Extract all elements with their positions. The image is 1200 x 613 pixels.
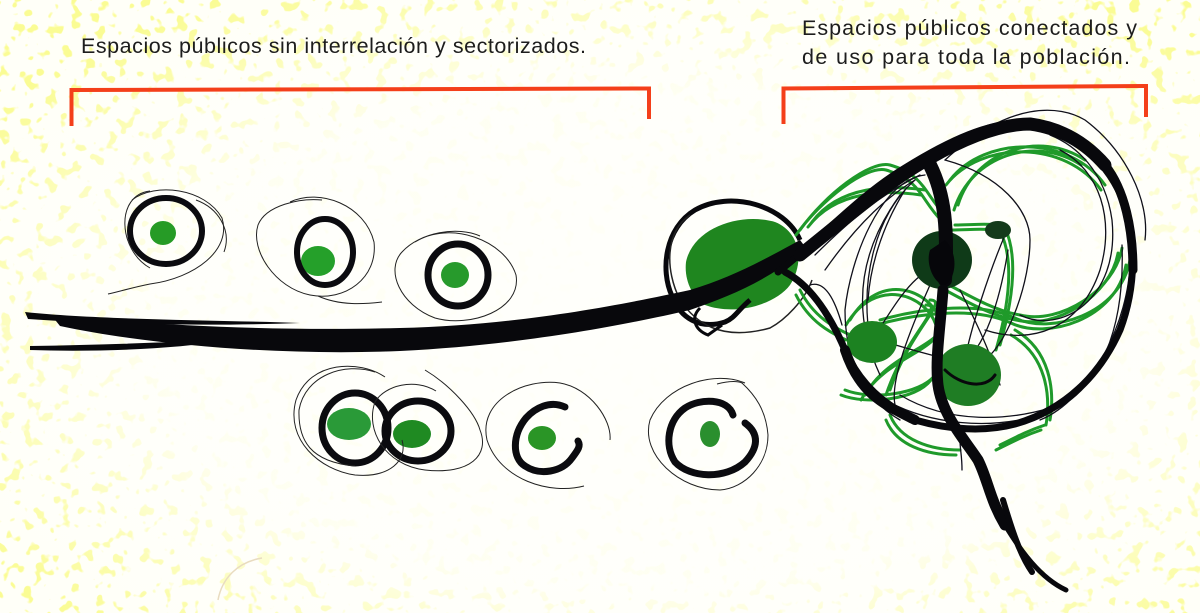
heading: left: Espacios públicos sin interrelación y sectorizados. <box>81 34 586 58</box>
open ring space 1 <box>486 382 610 489</box>
faint pencil mark <box>218 558 262 600</box>
blob: dark space <box>912 231 972 289</box>
bracket: left <box>72 88 649 126</box>
open ring space 2 <box>648 378 768 490</box>
circle group: lower row, isolated spaces <box>294 366 768 490</box>
isolated space 2 <box>257 197 382 304</box>
connected network: right cluster <box>778 110 1146 590</box>
green connections <box>796 146 1130 455</box>
bracket: right <box>784 86 1146 124</box>
main stroke: tapered black line <box>25 240 806 352</box>
blob: lower green space <box>935 344 1001 406</box>
central large space <box>666 201 812 335</box>
isolated space 3 <box>395 231 516 321</box>
isolated space 1 <box>108 190 226 294</box>
overlapping spaces <box>294 366 483 475</box>
thin black lines <box>810 110 1146 470</box>
black spiral <box>778 123 1133 429</box>
heading: right: Espacios públicos conectados y <box>802 16 1137 40</box>
heading: right: de uso para toda la población. <box>802 45 1130 69</box>
heading: right <box>802 16 1137 69</box>
blob: left green space <box>847 321 897 363</box>
black vertical stroke <box>930 165 946 280</box>
circle group: upper row, isolated spaces <box>108 190 516 321</box>
blob: small dark space <box>985 221 1011 239</box>
